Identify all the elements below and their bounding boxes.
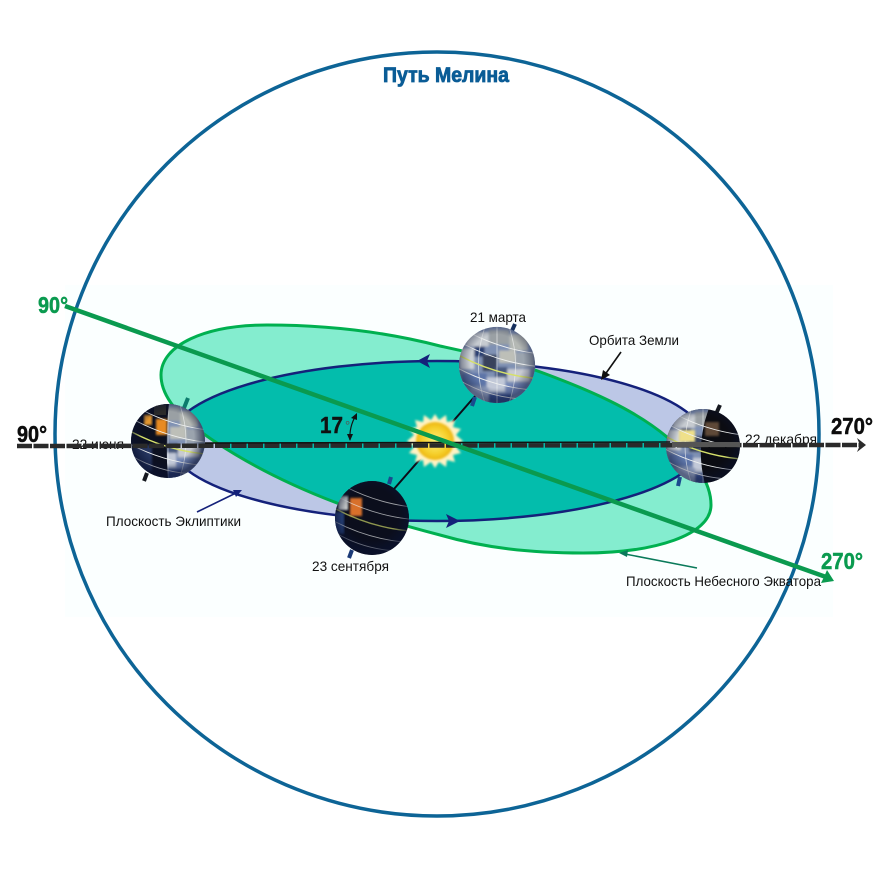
outer circle: path of Melin xyxy=(55,52,819,816)
Earth: 22 December xyxy=(666,404,740,486)
angle mark: 17 degrees xyxy=(320,412,357,441)
label: 270 degrees green: 270° xyxy=(821,548,863,574)
label: 22 June: 22 июня xyxy=(72,436,124,452)
callout: plane of the ecliptic xyxy=(106,490,242,529)
ecliptic axis line xyxy=(17,438,866,452)
equator axis line xyxy=(65,306,834,583)
plane of the ecliptic xyxy=(169,361,705,521)
Earth: 23 September xyxy=(335,476,409,559)
Earth: 21 March xyxy=(458,323,536,407)
callout: Earth orbit xyxy=(589,332,679,380)
label: 23 September: 23 сентября xyxy=(312,558,389,574)
callout: plane of the celestial equator: Плоскость Небесного Экватора xyxy=(626,573,821,589)
sun xyxy=(407,414,463,468)
orbit direction arrows xyxy=(417,354,460,528)
ellipse outlines xyxy=(161,325,711,553)
title: Путь Мелина xyxy=(383,64,509,87)
label: 21 March: 21 марта xyxy=(470,309,526,325)
label: 270 degrees black: 270° xyxy=(831,413,873,439)
callout: Earth orbit: Орбита Земли xyxy=(589,332,679,348)
background panel xyxy=(65,285,833,617)
angle mark: 17 degrees: 17 xyxy=(320,412,343,438)
callout: plane of the celestial equator xyxy=(619,550,821,589)
angle mark: 17 degrees: ° xyxy=(345,418,350,433)
label: 90 degrees black: 90° xyxy=(17,421,47,447)
callout: plane of the ecliptic: Плоскость Эклиптики xyxy=(106,513,241,529)
plane of the celestial equator xyxy=(161,325,711,553)
Earth: 22 June xyxy=(131,397,205,482)
label: 22 December: 22 декабря xyxy=(745,431,817,447)
label: 90 degrees green: 90° xyxy=(38,292,68,318)
line from sun to the solstice Earths xyxy=(394,395,476,489)
